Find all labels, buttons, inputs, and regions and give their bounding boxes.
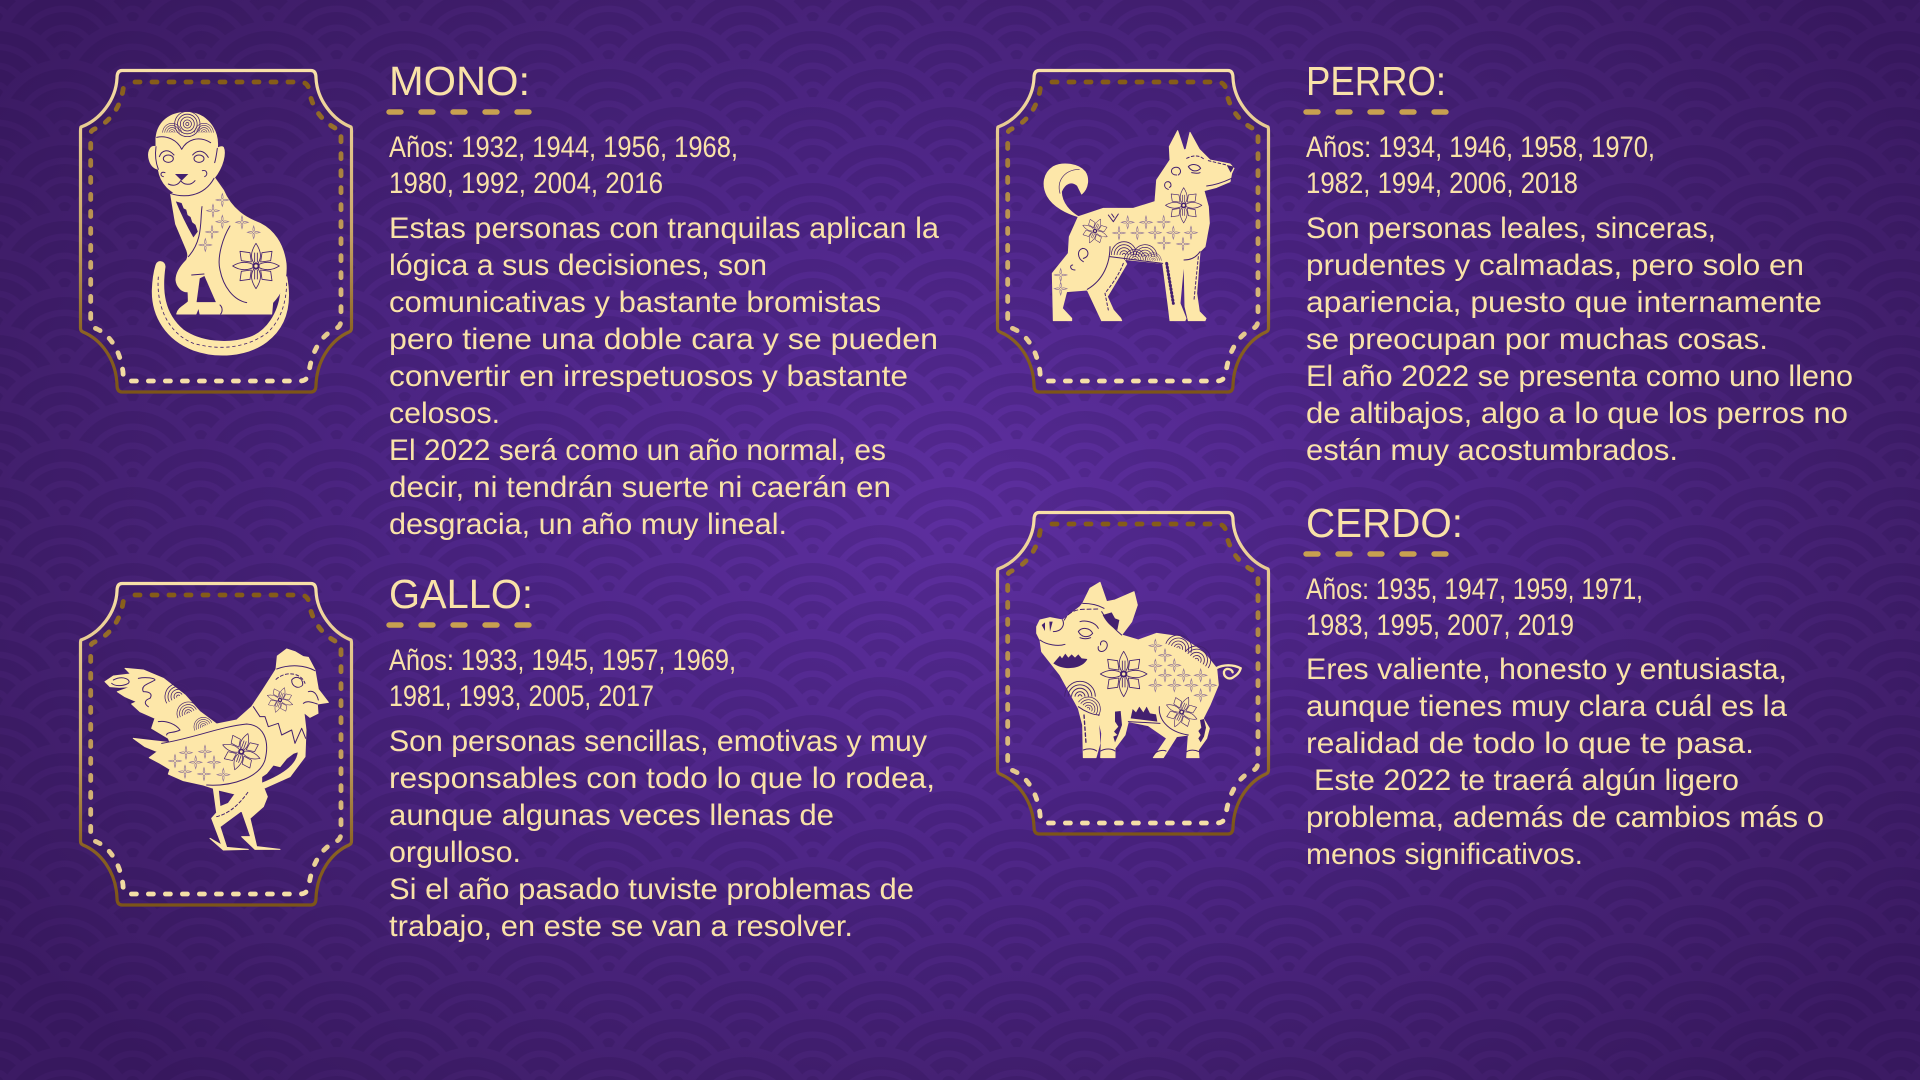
text: gallo description	[389, 725, 935, 943]
heading: perro: PERRO:	[1306, 58, 1446, 104]
years: cerdo: 1983, 1995, 2007, 2019	[1306, 609, 1574, 642]
panel: perro	[998, 58, 1853, 467]
dashes: mono	[389, 111, 532, 113]
icon: monkey	[149, 111, 288, 355]
years: cerdo: Años: 1935, 1947, 1959, 1971,	[1306, 573, 1643, 606]
frame: mono	[80, 70, 352, 392]
heading: mono: MONO:	[389, 58, 530, 104]
years: perro	[1306, 131, 1655, 200]
text: mono description	[389, 212, 939, 541]
years: mono: Años: 1932, 1944, 1956, 1968,	[389, 131, 738, 164]
frame: cerdo	[998, 512, 1268, 834]
text: perro description: prudentes y calmadas, pero solo en	[1306, 249, 1804, 282]
dashes: perro	[1306, 111, 1449, 113]
years: mono	[389, 131, 738, 200]
text: perro description: se preocupan por muchas cosas.	[1306, 323, 1768, 356]
text: perro description	[1306, 212, 1853, 467]
panel: gallo	[80, 571, 935, 943]
text: mono description: lógica a sus decisiones, son	[389, 249, 767, 282]
panel: cerdo	[998, 500, 1824, 871]
text: cerdo description: menos significativos.	[1306, 838, 1583, 871]
icon: rooster	[105, 649, 328, 850]
text: mono description: decir, ni tendrán suerte ni caerán en	[389, 471, 891, 504]
text: mono description: desgracia, un año muy lineal.	[389, 508, 787, 541]
text: mono description: El 2022 será como un año normal, es	[389, 434, 886, 467]
years: perro: 1982, 1994, 2006, 2018	[1306, 167, 1578, 200]
text: mono description: celosos.	[389, 397, 500, 430]
text: perro description: El año 2022 se presenta como uno lleno	[1306, 360, 1853, 393]
years: gallo	[389, 644, 736, 713]
text: gallo description: responsables con todo lo que lo rodea,	[389, 762, 935, 795]
panel: mono	[80, 58, 939, 541]
text: cerdo description: aunque tienes muy clara cuál es la	[1306, 690, 1787, 723]
text: cerdo description: Eres valiente, honesto y entusiasta,	[1306, 653, 1787, 686]
dashes: gallo	[389, 624, 532, 626]
text: perro description: están muy acostumbrados.	[1306, 434, 1678, 467]
text: mono description: Estas personas con tranquilas aplican la	[389, 212, 939, 245]
text: mono description: pero tiene una doble cara y se pueden	[389, 323, 938, 356]
icon: pig	[1037, 582, 1241, 758]
text: perro description: Son personas leales, sinceras,	[1306, 212, 1716, 245]
text: mono description: convertir en irrespetuosos y bastante	[389, 360, 908, 393]
text: gallo description: Si el año pasado tuviste problemas de	[389, 873, 914, 906]
years: gallo: 1981, 1993, 2005, 2017	[389, 680, 654, 713]
dashes: cerdo	[1306, 553, 1449, 555]
text: gallo description: Son personas sencillas, emotivas y muy	[389, 725, 927, 758]
text: mono description: comunicativas y bastante bromistas	[389, 286, 881, 319]
years: cerdo	[1306, 573, 1643, 642]
years: perro: Años: 1934, 1946, 1958, 1970,	[1306, 131, 1655, 164]
text: cerdo description	[1306, 653, 1824, 871]
text: cerdo description: Este 2022 te traerá algún ligero	[1314, 764, 1739, 797]
text: gallo description: trabajo, en este se van a resolver.	[389, 910, 853, 943]
text: perro description: de altibajos, algo a lo que los perros no	[1306, 397, 1848, 430]
text: perro description: apariencia, puesto que internamente	[1306, 286, 1822, 319]
text: cerdo description: problema, además de cambios más o	[1306, 801, 1824, 834]
heading: gallo: GALLO:	[389, 571, 533, 617]
heading: cerdo: CERDO:	[1306, 500, 1463, 546]
text: gallo description: orgulloso.	[389, 836, 521, 869]
icon: dog	[1044, 131, 1234, 321]
frame: gallo	[80, 584, 352, 905]
years: gallo: Años: 1933, 1945, 1957, 1969,	[389, 644, 736, 677]
years: mono: 1980, 1992, 2004, 2016	[389, 167, 663, 200]
frame: perro	[998, 70, 1268, 392]
text: gallo description: aunque algunas veces llenas de	[389, 799, 834, 832]
text: cerdo description: realidad de todo lo que te pasa.	[1306, 727, 1754, 760]
